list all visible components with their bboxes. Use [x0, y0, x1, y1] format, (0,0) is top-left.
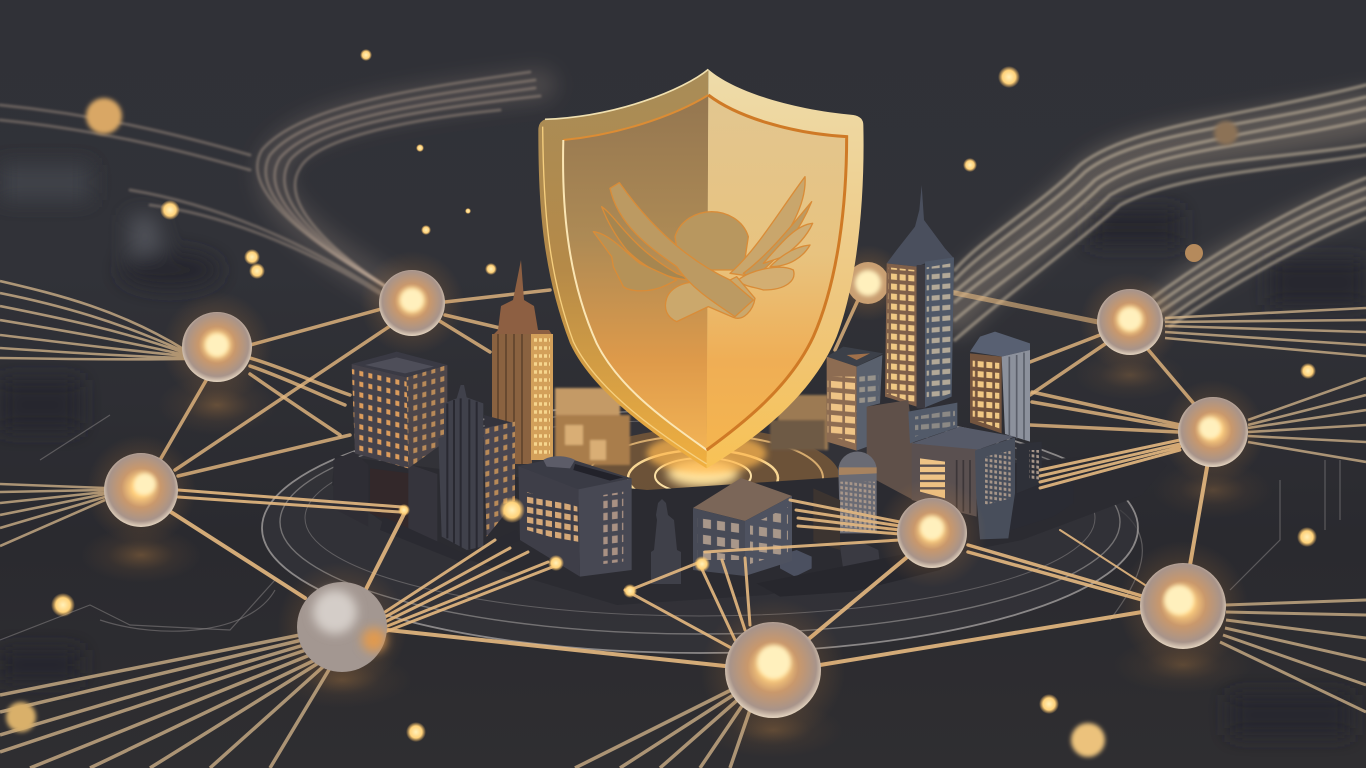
- node: left: [86, 435, 196, 545]
- outward strand fans: [0, 281, 1366, 768]
- circuit traces: [0, 415, 1340, 640]
- fan: lower left node: [0, 635, 330, 768]
- fan: right middle node: [1248, 378, 1366, 462]
- building: left block with lit windows: [352, 352, 447, 468]
- node: behind tower: [830, 245, 906, 321]
- building: small statue tower: [651, 499, 681, 584]
- shield: [538, 69, 864, 473]
- small warm buildings behind centre: [555, 388, 828, 465]
- node: centre right: [877, 478, 987, 588]
- node floor glow: [81, 350, 1273, 758]
- node: lower left: [277, 562, 407, 692]
- right city cluster: [757, 185, 1073, 597]
- fan: upper right node: [1165, 308, 1366, 356]
- shield inner face: [563, 95, 847, 450]
- node: top left: [360, 251, 464, 355]
- fan: bottom node: [575, 688, 752, 768]
- network links in front of city: [160, 440, 1210, 666]
- building: front centre block: [693, 478, 792, 576]
- node: bottom centre: [701, 598, 845, 742]
- building: front low block: [518, 456, 632, 577]
- building: fluted dark tower: [438, 385, 483, 550]
- flowing light strands: upper left: [0, 72, 540, 302]
- fan: lower right node: [1220, 600, 1366, 712]
- blurred background objects: [0, 165, 1366, 735]
- building: right tower: [970, 332, 1030, 442]
- shield emblem: winged sun: [593, 177, 813, 322]
- city base plate: [332, 450, 1167, 605]
- glowing rings beneath shield: [570, 428, 840, 528]
- node: lower right: [1118, 541, 1248, 671]
- shield rim: [538, 69, 864, 468]
- fan: left upper node: [0, 281, 185, 359]
- building: domed block: [838, 452, 877, 533]
- node: upper right: [1080, 272, 1180, 372]
- node: right: [1161, 380, 1265, 484]
- flowing light strands: upper right: [955, 85, 1366, 340]
- left city cluster: [333, 352, 632, 577]
- building: gold tower with spire: [492, 260, 553, 464]
- fan: left middle node: [0, 484, 105, 546]
- background network links: [160, 290, 1195, 476]
- building: tall central-right tower with spire: [867, 185, 957, 500]
- building: side block with windows: [483, 415, 515, 537]
- building: dark annex and base: [980, 442, 1073, 540]
- platform rings: [262, 403, 1138, 653]
- building: mid block right of shield: [827, 347, 883, 451]
- building: left base blocks: [333, 452, 520, 563]
- node: upper left: [162, 292, 272, 402]
- glowing nodes: [86, 251, 1265, 742]
- building: low front blocks: [757, 488, 963, 597]
- building: right block cluster: [912, 427, 1015, 539]
